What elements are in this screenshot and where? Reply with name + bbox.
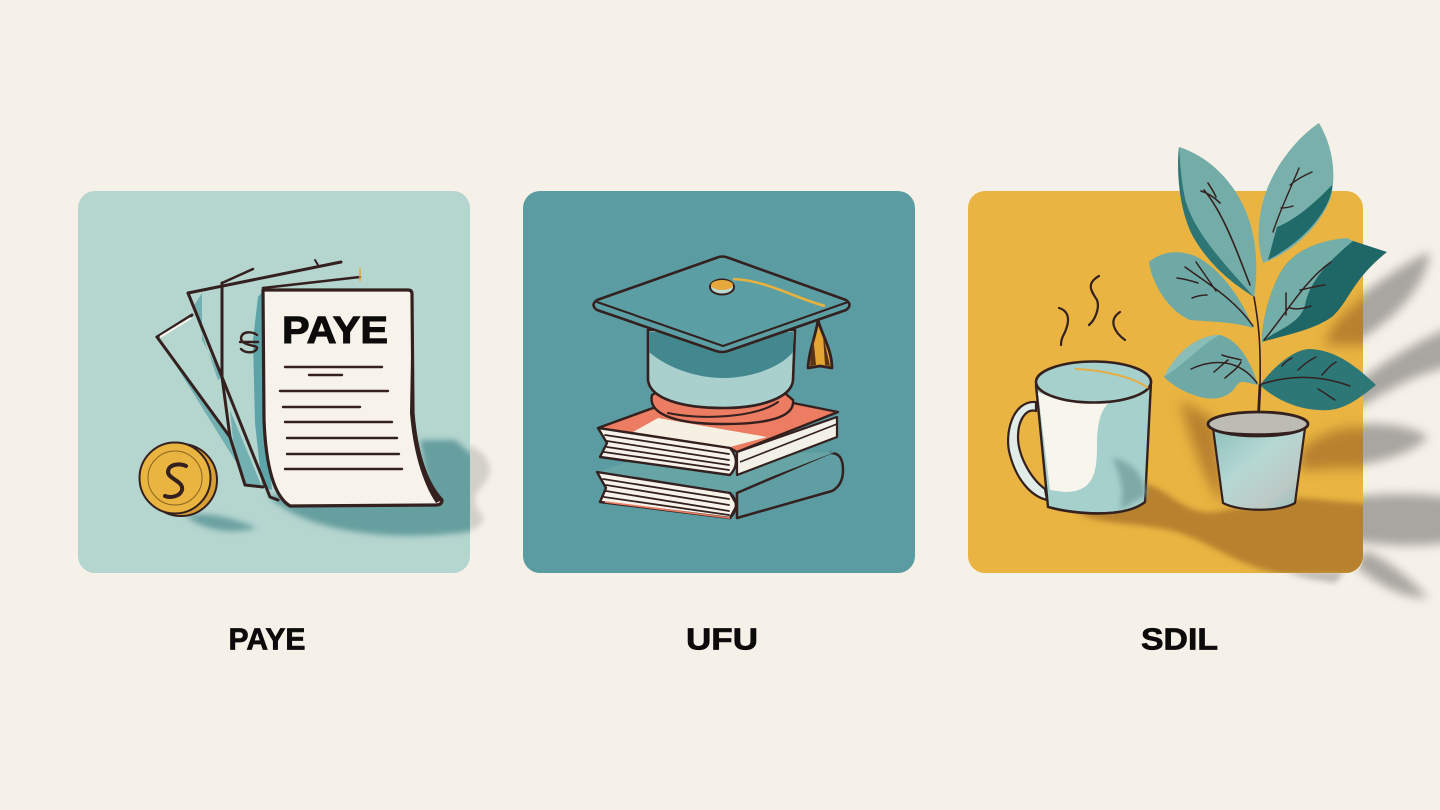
icon: steam bbox=[1059, 276, 1125, 345]
paper heading: PAYE bbox=[282, 310, 388, 352]
icon: mug bbox=[1008, 362, 1151, 514]
back papers bbox=[157, 260, 360, 500]
panel: UFU bbox=[523, 191, 915, 573]
pot body bbox=[1213, 428, 1305, 510]
leaf: right bbox=[1262, 239, 1387, 342]
leaf: left bbox=[1149, 252, 1253, 328]
panel: SDIL bbox=[968, 123, 1440, 598]
icon: books bbox=[597, 385, 843, 518]
stem bbox=[1254, 297, 1260, 385]
mug handle bbox=[1008, 402, 1047, 500]
small dollar mark bbox=[240, 332, 258, 352]
upper book bbox=[737, 417, 837, 475]
label: SDIL: SDIL bbox=[1141, 622, 1218, 656]
plant and mug shadows on card bbox=[1075, 290, 1380, 575]
mortarboard band bbox=[652, 385, 793, 424]
leaf: top right bbox=[1259, 123, 1333, 263]
label: PAYE: PAYE bbox=[228, 622, 306, 656]
paper cast shadow bbox=[186, 440, 490, 536]
leaf: lower left bbox=[1164, 335, 1258, 399]
tassel bbox=[808, 320, 832, 368]
cord bbox=[733, 279, 825, 306]
icon: graduation cap bbox=[594, 256, 850, 408]
card background bbox=[523, 191, 915, 573]
card background bbox=[78, 191, 470, 573]
mug rim bbox=[1036, 362, 1151, 402]
lower book bbox=[737, 453, 843, 518]
window shadow outside card bbox=[1285, 252, 1440, 598]
icon: coin bbox=[140, 442, 217, 516]
pot rim bbox=[1208, 412, 1308, 436]
mug body bbox=[1036, 382, 1151, 514]
button bbox=[710, 280, 734, 294]
cap board bbox=[594, 256, 850, 352]
icon: potted plant bbox=[1149, 123, 1387, 510]
leaf: lower right bbox=[1260, 349, 1376, 410]
panel: PAYE bbox=[78, 191, 490, 573]
paper text lines bbox=[280, 367, 402, 469]
label: UFU: UFU bbox=[686, 622, 758, 656]
cap body bbox=[648, 330, 795, 408]
card background bbox=[968, 191, 1363, 573]
leaf: top left bbox=[1178, 147, 1256, 297]
front paper bbox=[263, 290, 442, 506]
